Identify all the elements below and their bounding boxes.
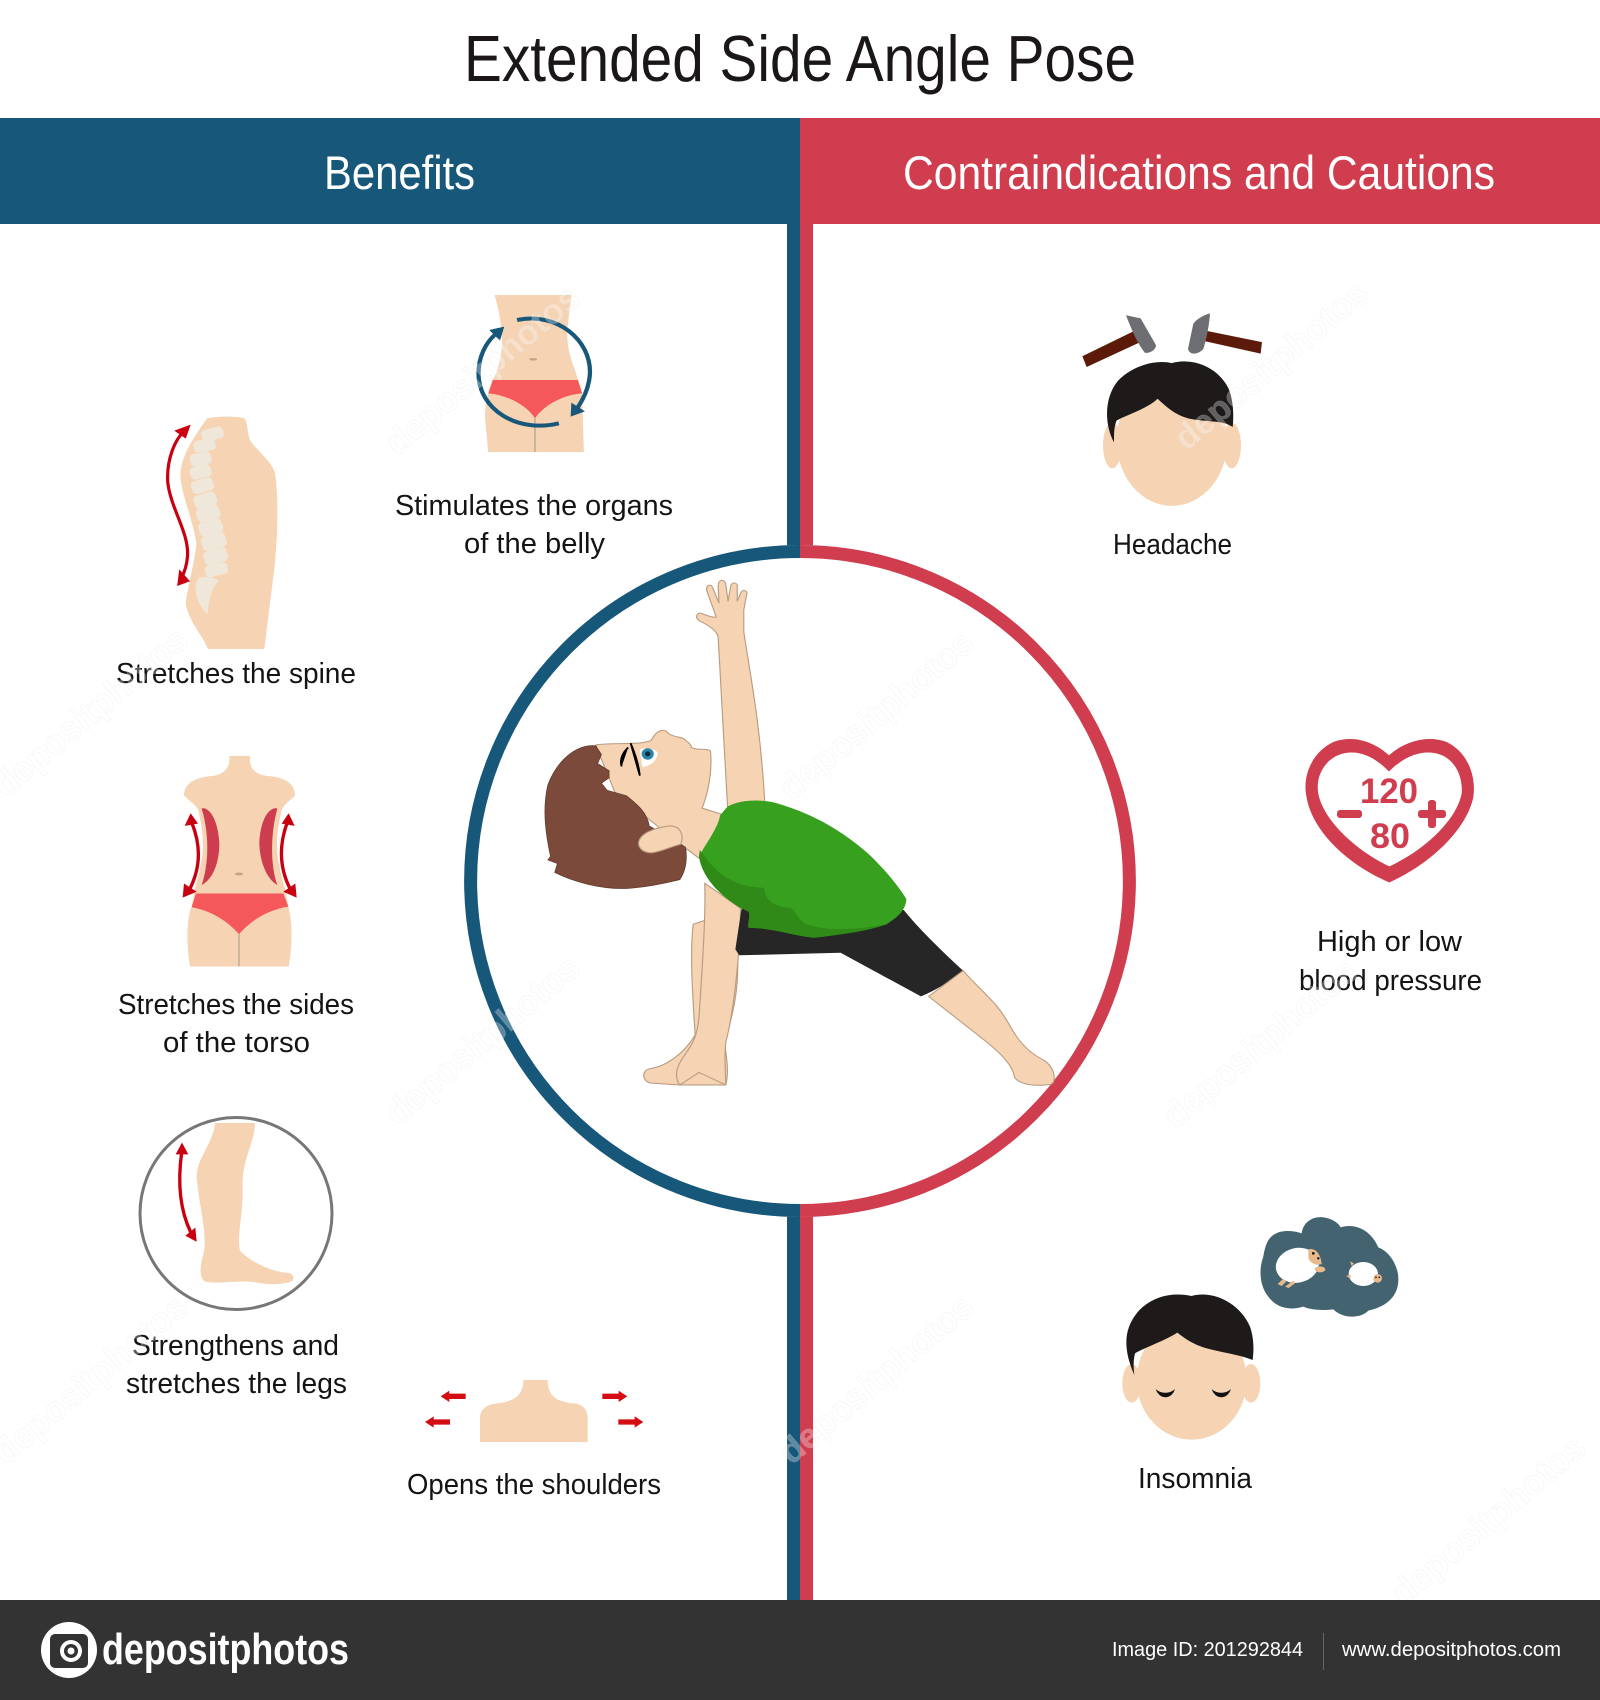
head and neck: [596, 730, 722, 858]
eye and brow: [640, 748, 658, 767]
icon: spine: [168, 417, 277, 649]
supporting foot: [644, 1035, 727, 1085]
label: high or low blood pressure: [1299, 926, 1482, 997]
logo icon: camera: [41, 1622, 97, 1678]
title: Extended Side Angle Pose: [464, 22, 1136, 95]
watermark overlays: depositphotos: [1384, 1428, 1593, 1613]
vertebrae: [189, 426, 230, 614]
website: www.depositphotos.com: [1341, 1639, 1561, 1661]
icon: headache: [1082, 313, 1262, 506]
label: stretches the sides of the torso: of the torso: [163, 1027, 310, 1059]
label: insomnia: Insomnia: [1138, 1463, 1253, 1495]
icon: belly organs: [479, 295, 590, 452]
label: high or low blood pressure: High or low: [1317, 926, 1463, 958]
logo wordmark: depositphotos: [102, 1625, 349, 1674]
panel header: benefits: Benefits: [324, 146, 475, 199]
torso side view: [180, 417, 277, 649]
panel header: benefits: [0, 118, 800, 224]
raised arm: [697, 580, 765, 810]
hammers: [1082, 313, 1262, 367]
central divider line: [787, 224, 813, 1600]
icon: leg in circle: [140, 1118, 332, 1310]
label: strengthens and stretches the legs: stretches the legs: [126, 1368, 347, 1400]
label: stretches the sides of the torso: Stretches the sides: [118, 989, 354, 1021]
shorts: [735, 906, 963, 996]
watermark overlays: depositphotos: [1167, 273, 1376, 458]
icon: insomnia sleeping head: [1122, 1217, 1398, 1440]
panel header: contraindications and cautions: Contraindications and Cautions: [903, 146, 1495, 199]
outward arrows: [425, 1391, 643, 1428]
back support leg: [692, 917, 738, 1039]
label: strengthens and stretches the legs: Strengthens and: [132, 1330, 339, 1362]
shirt: [699, 800, 906, 938]
label: high or low blood pressure: blood pressure: [1299, 965, 1482, 997]
icon: blood pressure heart: 80: [1370, 817, 1410, 856]
watermark overlays: depositphotos: [772, 1287, 981, 1472]
watermark overlays: [0, 273, 1593, 1613]
footer bar: [0, 1600, 1600, 1700]
stretch arrow: [168, 425, 191, 586]
label: stimulates the organs of the belly: of the belly: [464, 528, 605, 560]
icon: torso sides: [183, 756, 297, 966]
image id: Image ID: 201292844: [1112, 1639, 1303, 1661]
side arrows: [189, 823, 291, 890]
thought cloud with sheep: [1261, 1217, 1398, 1317]
watermark overlays: depositphotos: [378, 948, 587, 1133]
icon: shoulders: [425, 1380, 643, 1442]
label: opens the shoulders: Opens the shoulders: [407, 1469, 661, 1501]
circular arrows: [479, 319, 590, 426]
label: stretches the sides of the torso: [118, 989, 354, 1059]
label: stimulates the organs of the belly: Stimulates the organs: [395, 490, 673, 522]
hair: [545, 746, 686, 889]
yoga figure: extended side angle pose: [545, 580, 1054, 1085]
label: stimulates the organs of the belly: [395, 490, 673, 560]
icon: blood pressure heart: [1305, 739, 1474, 882]
central circle: [464, 545, 1136, 1217]
watermark overlays: depositphotos: [772, 623, 981, 808]
panel header: contraindications and cautions: [800, 118, 1600, 224]
ear: [639, 826, 682, 853]
supporting arm: [677, 883, 740, 1085]
watermark overlays: depositphotos: [378, 278, 587, 463]
watermark overlays: depositphotos: [1156, 951, 1365, 1136]
shirt shading: [699, 850, 883, 938]
icon: blood pressure heart: 120: [1360, 772, 1418, 811]
label: strengthens and stretches the legs: [126, 1330, 347, 1400]
label: headache: Headache: [1113, 529, 1232, 561]
back leg: [929, 971, 1054, 1085]
label: stretches the spine: Stretches the spine: [116, 658, 356, 690]
